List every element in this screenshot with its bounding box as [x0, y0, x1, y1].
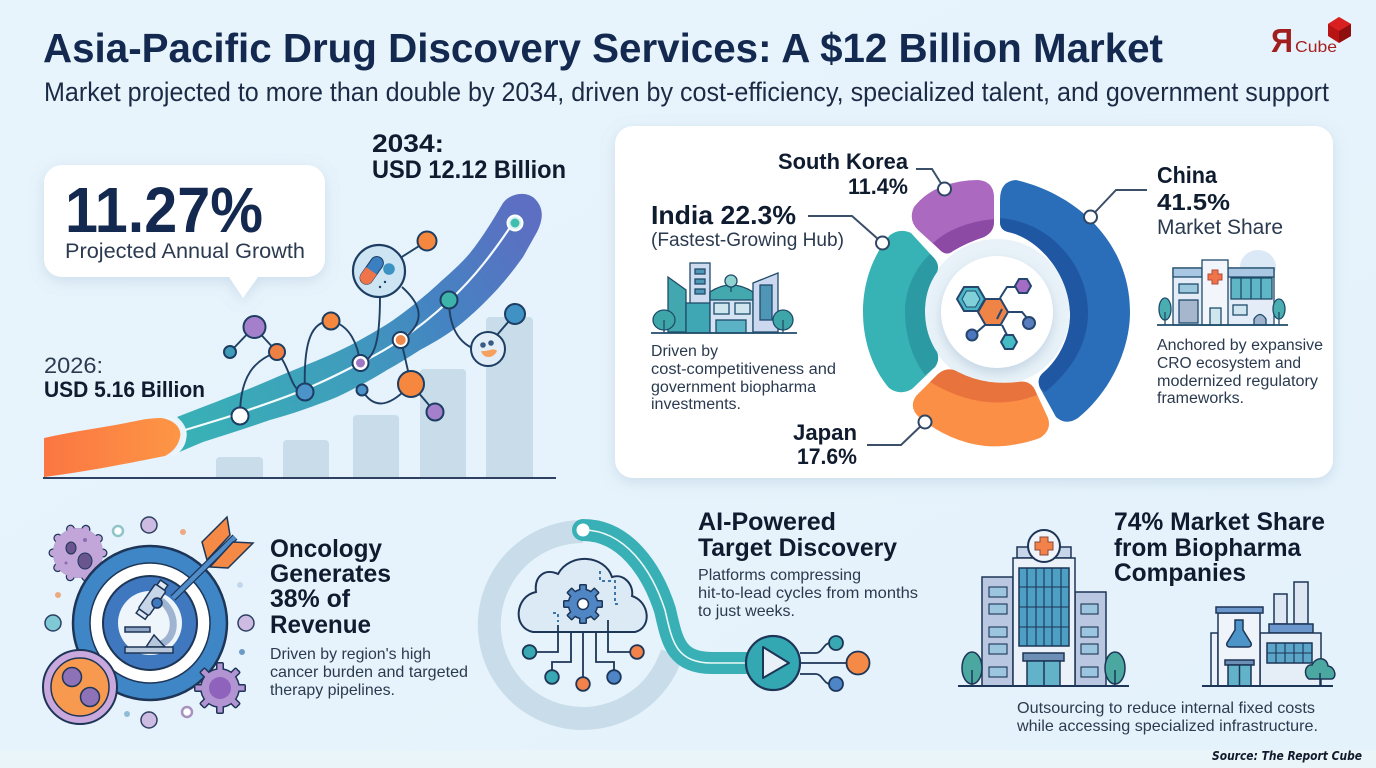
- label: China: China: [1157, 162, 1217, 188]
- leader: South Korea: [916, 169, 951, 196]
- icon: cell bubble: [471, 332, 505, 366]
- label: 2034 value: [372, 130, 566, 184]
- label: India: [651, 200, 844, 251]
- heading: biopharma: Companies: [1114, 559, 1246, 587]
- text: oncology description: therapy pipelines.: [270, 682, 395, 699]
- text: China description: modernized regulatory: [1157, 373, 1318, 390]
- growth figure: 11.27%: [65, 174, 263, 246]
- label: 2034 value: 2034:: [372, 130, 444, 158]
- text: India description: cost-competitiveness and: [651, 361, 836, 378]
- heading: AI: Target Discovery: [698, 534, 897, 562]
- label: 2026 value: [44, 353, 205, 402]
- icon: molecule: [957, 279, 1035, 349]
- source note: Source: The Report Cube: [1212, 749, 1362, 763]
- heading: oncology: Revenue: [270, 611, 371, 639]
- label: Japan: 17.6%: [797, 444, 857, 469]
- text: biopharma description: Outsourcing to reduce internal fixed costs: [1017, 700, 1315, 717]
- text: biopharma description: while accessing specialized infrastructure.: [1016, 718, 1318, 735]
- panel: oncology: [43, 517, 468, 728]
- heading: biopharma: 74% Market Share: [1114, 508, 1325, 536]
- floating dots: [45, 517, 254, 728]
- growth label: Projected Annual Growth: [65, 239, 305, 263]
- icon: pharma factory: [1202, 582, 1335, 686]
- arrow: [173, 517, 253, 598]
- callout: annual growth: [44, 165, 325, 298]
- heading: biopharma: [1114, 508, 1325, 587]
- target rings: [73, 546, 227, 700]
- network nodes: [224, 216, 525, 424]
- label: India: (Fastest-Growing Hub): [651, 230, 844, 251]
- text: India description: investments.: [651, 396, 741, 413]
- play button: [746, 636, 870, 691]
- panel: biopharma share: [958, 508, 1335, 735]
- label: China: [1157, 162, 1283, 239]
- donut chart: [863, 180, 1130, 446]
- heading: oncology: 38% of: [270, 585, 351, 613]
- heading: oncology: [270, 535, 391, 639]
- logo: RCube: Cube: [1295, 39, 1337, 56]
- bar chart: background bars: [216, 317, 533, 478]
- segment: South Korea: [912, 180, 994, 254]
- heading: AI: [698, 508, 897, 562]
- logo: RCube: [1271, 17, 1351, 59]
- label: Japan: Japan: [793, 420, 857, 445]
- microscope: [125, 579, 173, 653]
- icon: China hospital: [1157, 250, 1288, 325]
- heading: biopharma: from Biopharma: [1114, 534, 1302, 562]
- label: South Korea: [778, 149, 909, 199]
- leader: India: [808, 216, 889, 250]
- title: Asia-Pacific Drug Discovery Services: A $12 Billion Market: [43, 25, 1163, 71]
- progress ring: [489, 531, 672, 718]
- heading: AI: AI-Powered: [698, 508, 836, 536]
- heading: oncology: Oncology: [270, 535, 382, 563]
- label: 2026 value: USD 5.16 Billion: [44, 377, 205, 402]
- segment: Japan: [913, 369, 1049, 446]
- text: China description: [1157, 337, 1323, 407]
- orange start segment: [44, 418, 180, 477]
- label: Japan: [793, 420, 857, 469]
- text: AI description: to just weeks.: [698, 603, 795, 620]
- gear: [563, 584, 603, 624]
- cloud: [519, 559, 647, 632]
- text: India description: [651, 343, 836, 413]
- label: India: India 22.3%: [651, 200, 796, 230]
- label: China: 41.5%: [1157, 189, 1230, 215]
- teal path: [583, 530, 750, 663]
- label: South Korea: South Korea: [778, 149, 909, 174]
- gear-shaped cell: bottom right: [194, 662, 246, 714]
- leader: China: [1084, 190, 1147, 224]
- text: biopharma description: [1016, 700, 1318, 735]
- logo: RCube: Я: [1271, 22, 1293, 59]
- label: 2026 value: 2026:: [44, 353, 103, 378]
- label: China: Market Share: [1157, 216, 1283, 239]
- heading: oncology: Generates: [270, 560, 391, 588]
- label: South Korea: 11.4%: [848, 174, 908, 199]
- text: India description: government biopharma: [651, 379, 816, 396]
- text: oncology description: cancer burden and targeted: [270, 664, 468, 681]
- segment: China: [1000, 180, 1130, 422]
- virus: top left: [53, 528, 103, 578]
- segment: India: [863, 231, 938, 392]
- text: AI description: Platforms compressing: [698, 567, 861, 584]
- circuit lines: [536, 620, 630, 677]
- text: AI description: hit-to-lead cycles from months: [698, 585, 918, 602]
- icon: target with microscope and cells: [43, 517, 254, 728]
- label: 2034 value: USD 12.12 Billion: [372, 156, 566, 184]
- leader: Japan: [867, 416, 932, 445]
- panel: AI target discovery: [489, 508, 918, 718]
- panel: regional market share: [615, 126, 1333, 478]
- text: oncology description: [270, 646, 468, 699]
- growth band: [177, 194, 542, 453]
- icon: pill bubble: [353, 245, 405, 297]
- icon: AI cloud pipeline: [489, 524, 870, 718]
- text: AI description: [698, 567, 918, 620]
- text: India description: Driven by: [651, 343, 718, 360]
- text: China description: CRO ecosystem and: [1157, 355, 1301, 372]
- text: China description: Anchored by expansive: [1157, 337, 1323, 354]
- text: China description: frameworks.: [1157, 390, 1244, 407]
- icon: India city buildings: [651, 263, 797, 333]
- cell: orange: [43, 650, 117, 724]
- network connectors: [230, 241, 515, 416]
- icon: hospital tower: [958, 530, 1129, 686]
- growth chart: [43, 194, 556, 478]
- text: oncology description: Driven by region's high: [270, 646, 431, 663]
